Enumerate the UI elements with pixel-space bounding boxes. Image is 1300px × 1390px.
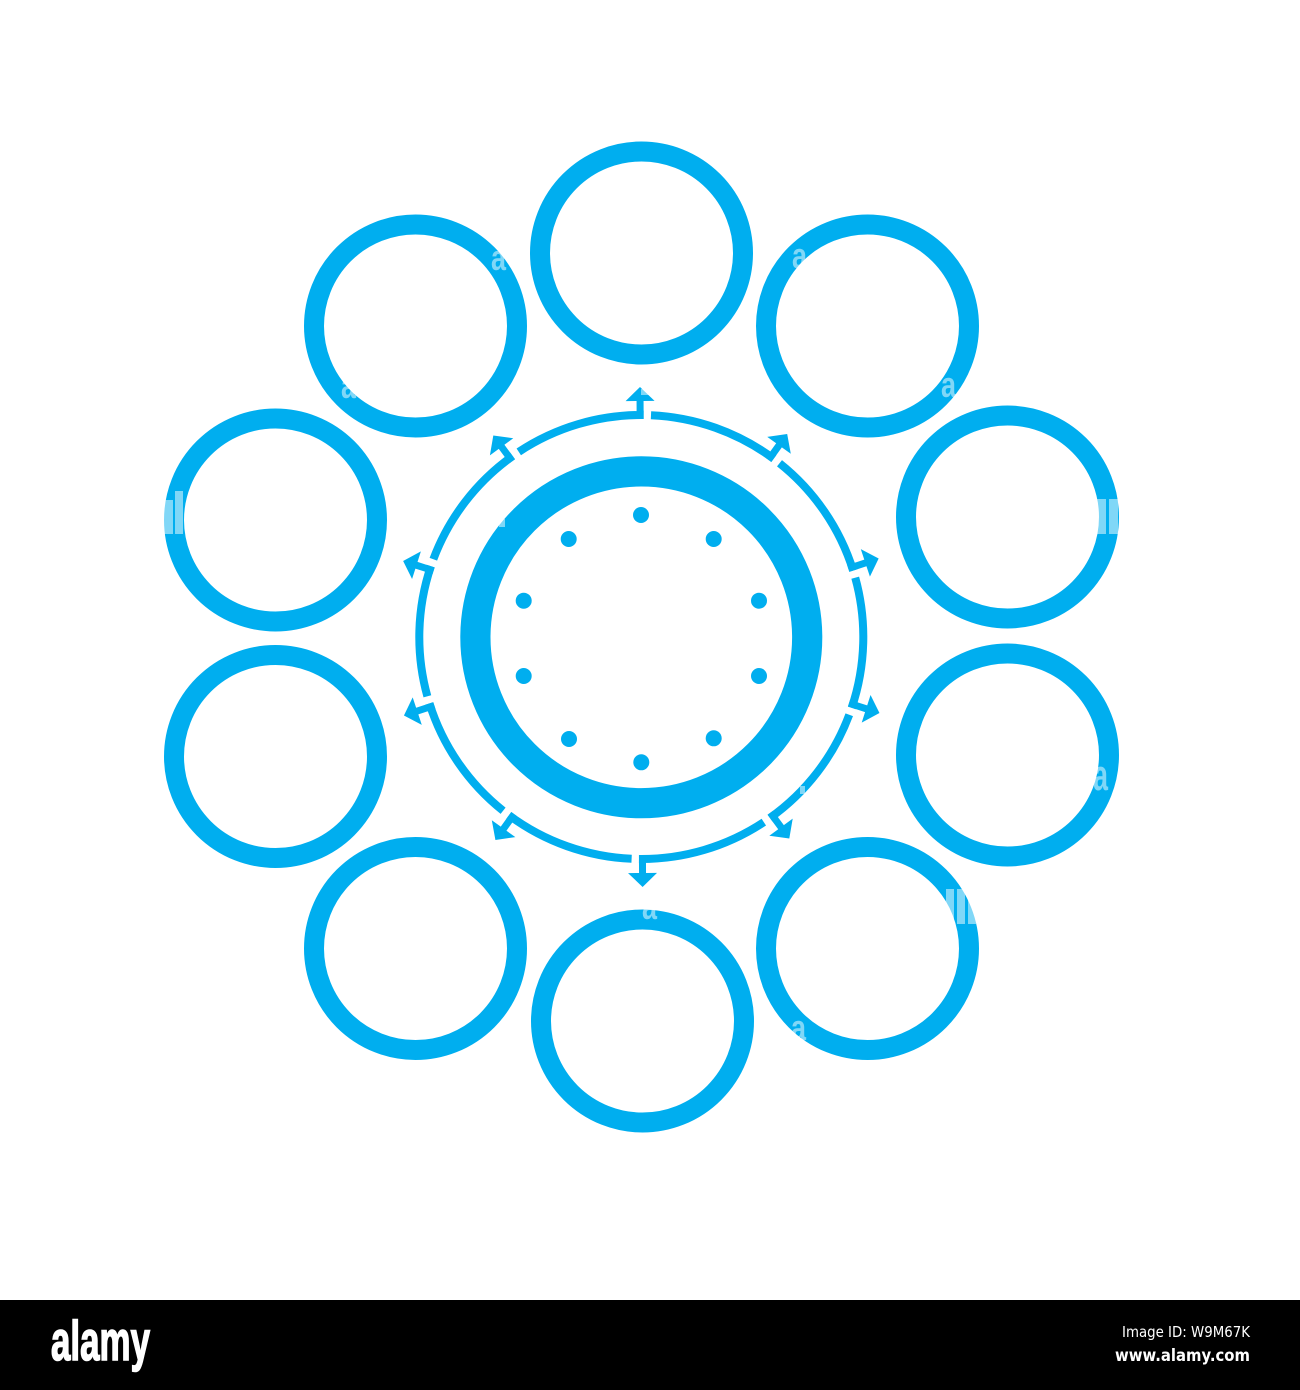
arrow: 216 degrees bbox=[387, 703, 549, 848]
circle: upper left bbox=[314, 224, 517, 428]
circle: lower right bbox=[766, 847, 969, 1050]
footer bar bbox=[0, 1300, 1300, 1390]
arrow: 324 degrees bbox=[482, 357, 644, 503]
watermark fragments on rings: a bbox=[1093, 751, 1108, 800]
watermark fragments on rings: a bbox=[642, 886, 658, 927]
segmented arrow ring bbox=[362, 357, 921, 917]
arrow: 72 degrees bbox=[805, 545, 921, 708]
circle: right upper bbox=[906, 416, 1109, 618]
watermark fragments on rings: a bbox=[491, 237, 507, 278]
circle: upper right bbox=[766, 224, 969, 428]
footer logo: alamy bbox=[51, 1309, 150, 1372]
watermark fragments on rings: a bbox=[341, 365, 357, 406]
image id: Image ID: W9M67K bbox=[1122, 1323, 1251, 1341]
watermark fragments on rings: a bbox=[941, 364, 957, 405]
watermark fragments on rings: a bbox=[792, 235, 808, 276]
outer circles group bbox=[174, 152, 1109, 1122]
arrow: 288 degrees bbox=[399, 434, 513, 597]
website: www.alamy.com bbox=[1115, 1346, 1250, 1366]
circle: bottom bbox=[541, 920, 744, 1122]
arrow: 0 degrees bbox=[625, 386, 774, 460]
central thick ring bbox=[475, 471, 807, 803]
arrow: 252 degrees bbox=[362, 566, 477, 729]
circle: top bbox=[540, 152, 743, 354]
circle: lower left bbox=[314, 847, 517, 1050]
arrow: 108 degrees bbox=[770, 677, 884, 840]
circle: left lower bbox=[174, 655, 377, 858]
arrow: 144 degrees bbox=[639, 771, 801, 917]
watermark fragments on rings: a bbox=[791, 1007, 807, 1048]
circle: right lower bbox=[906, 654, 1109, 856]
watermark fragments on rings bbox=[164, 235, 1118, 1048]
arrow: 36 degrees bbox=[733, 426, 895, 571]
arrow: 180 degrees bbox=[509, 814, 657, 888]
dial dots bbox=[516, 507, 767, 770]
circle: left upper bbox=[174, 418, 377, 622]
